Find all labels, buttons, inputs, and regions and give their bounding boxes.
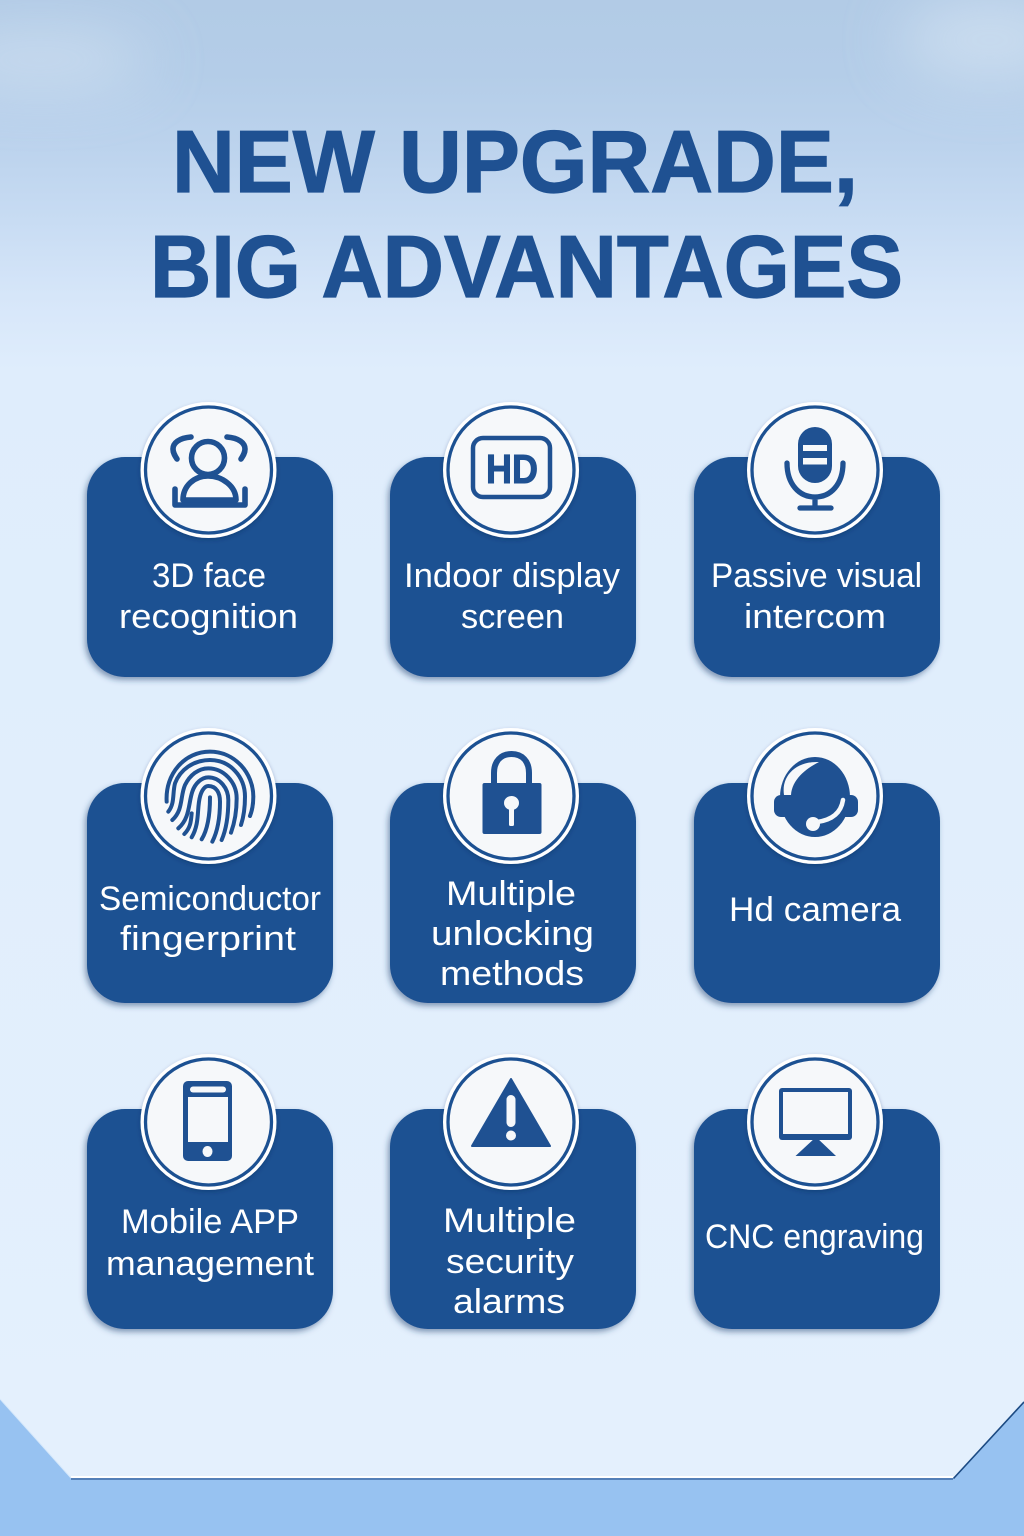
- label: [404, 557, 620, 636]
- label: Hd camera: [729, 891, 901, 929]
- label: recognition: [119, 598, 298, 636]
- label: Multiple: [446, 875, 576, 913]
- icon badge: [445, 1056, 577, 1188]
- label: Mobile APP: [121, 1203, 299, 1241]
- icon: HD screen: [473, 438, 550, 497]
- card: CNC engraving: [694, 1056, 940, 1329]
- icon badge: [749, 730, 881, 862]
- label: Multiple: [443, 1202, 576, 1240]
- label: alarms: [453, 1283, 565, 1321]
- icon: padlock: [482, 754, 542, 834]
- title: NEW UPGRADE,: [172, 112, 858, 211]
- label: screen: [461, 598, 564, 636]
- label: [106, 1203, 315, 1283]
- label: unlocking: [431, 915, 594, 953]
- icon badge: [445, 404, 577, 536]
- title: BIG ADVANTAGES: [150, 217, 903, 316]
- title: [150, 112, 903, 316]
- card: Hd camera: [694, 730, 940, 1003]
- card body: [87, 457, 333, 677]
- icon badge: [142, 730, 274, 862]
- label: intercom: [744, 598, 886, 636]
- card body: [87, 1109, 333, 1329]
- card: Indoor display screen: [390, 404, 636, 677]
- icon badge: [142, 1056, 274, 1188]
- card: Passive visual intercom: [694, 404, 940, 677]
- card: Semiconductor fingerprint: [87, 730, 333, 1003]
- icon badge: [142, 404, 274, 536]
- label: CNC engraving: [705, 1218, 924, 1256]
- icon: HD screen: HD: [486, 446, 538, 492]
- card: Mobile APP management: [87, 1056, 333, 1329]
- card: Multiple unlocking methods: [390, 730, 636, 1003]
- icon: warning triangle: [472, 1079, 550, 1146]
- icon: smartphone: [183, 1081, 232, 1161]
- card body: [694, 783, 940, 1003]
- label: 3D face: [152, 557, 266, 595]
- label: security: [446, 1243, 574, 1281]
- card body: [390, 783, 636, 1003]
- label: Semiconductor: [99, 880, 321, 918]
- icon: monitor: [779, 1088, 852, 1156]
- label: [431, 875, 594, 993]
- icon: face scan: [173, 437, 245, 505]
- card body: [390, 1109, 636, 1329]
- label: Indoor display: [404, 557, 620, 595]
- label: [119, 557, 298, 636]
- icon: headset: [774, 757, 858, 837]
- card body: [87, 783, 333, 1003]
- label: [99, 880, 321, 958]
- icon: microphone: [787, 427, 843, 508]
- label: [711, 557, 922, 636]
- bottom band: [0, 1380, 1024, 1536]
- icon badge: [749, 404, 881, 536]
- card: Multiple security alarms: [390, 1056, 636, 1329]
- icon badge: [445, 730, 577, 862]
- card: 3D face recognition: [87, 404, 333, 677]
- label: fingerprint: [120, 920, 297, 958]
- icon badge: [749, 1056, 881, 1188]
- icon: fingerprint: [167, 752, 253, 842]
- card body: [390, 457, 636, 677]
- label: management: [106, 1245, 315, 1283]
- card body: [694, 1109, 940, 1329]
- card body: [694, 457, 940, 677]
- label: methods: [440, 955, 584, 993]
- label: [443, 1202, 576, 1321]
- label: Passive visual: [711, 557, 922, 595]
